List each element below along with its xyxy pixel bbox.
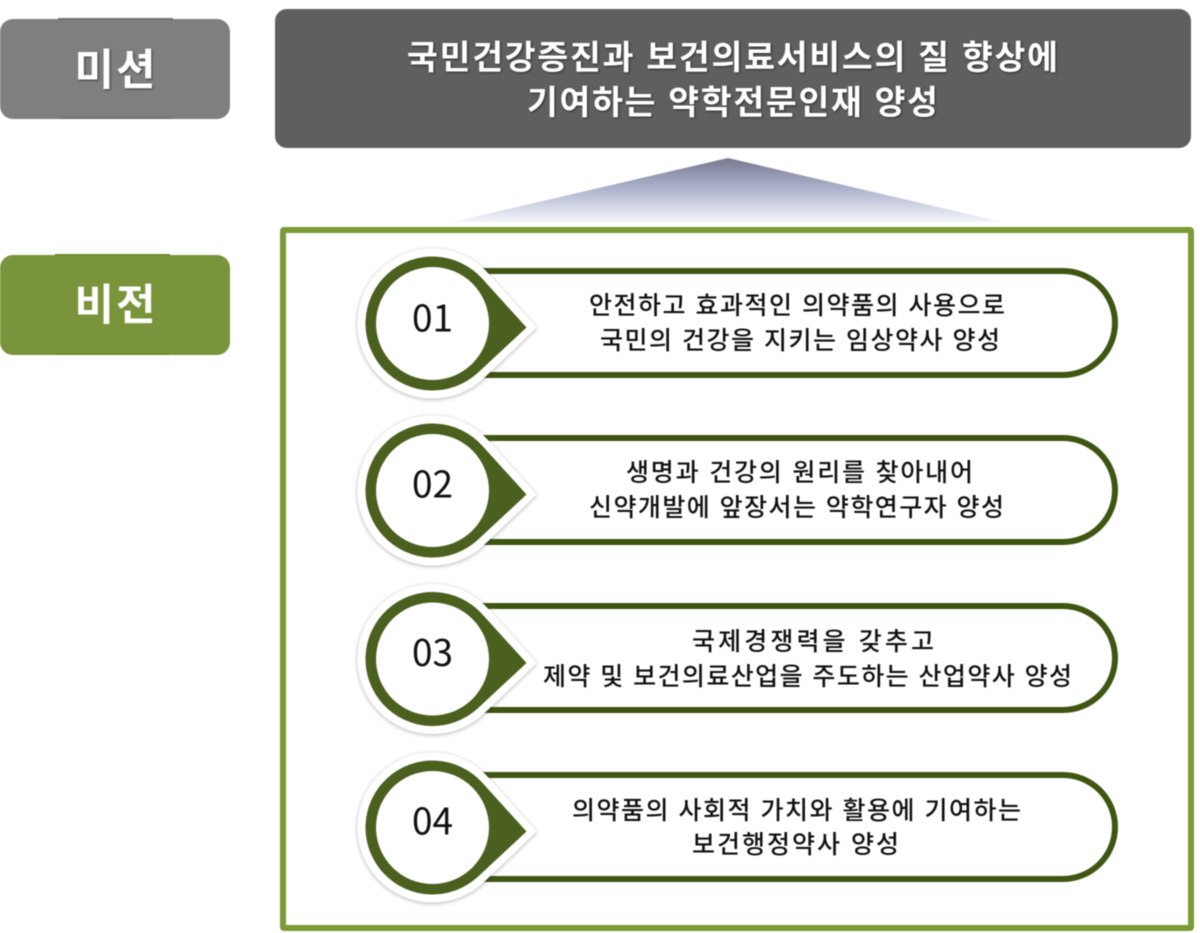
text 04 [572, 791, 1021, 861]
vision item 02 [357, 415, 1115, 565]
vision item 03 [357, 584, 1115, 734]
pill 03 [430, 606, 1115, 710]
badge 03: 03 [412, 623, 453, 677]
badge 02 [357, 415, 536, 565]
vision panel frame [283, 230, 1191, 928]
vision label: 비전 [74, 271, 156, 333]
mission label [0, 18, 230, 119]
mission statement box [275, 9, 1191, 148]
mission label: 미션 [74, 36, 156, 98]
pill 01 [430, 271, 1115, 375]
pill 02 [430, 438, 1115, 542]
text 03 [543, 622, 1072, 693]
text 01: 안전하고 효과적인 의약품의 사용으로 [589, 286, 1005, 322]
vision item 04 [357, 752, 1115, 902]
badge 01 [357, 248, 536, 398]
pill 04 [430, 775, 1115, 879]
text 01: 국민의 건강을 지키는 임상약사 양성 [600, 321, 1000, 357]
badge 02: 02 [412, 454, 453, 508]
text 02: 생명과 건강의 원리를 찾아내어 [626, 453, 973, 489]
text 02: 신약개발에 앞장서는 약학연구자 양성 [589, 488, 1004, 524]
vision item 01 [357, 248, 1115, 398]
vision label [0, 254, 230, 355]
text 02 [589, 453, 1004, 524]
text 04: 보건행정약사 양성 [692, 825, 899, 861]
badge 03 [357, 584, 536, 734]
badge 04: 04 [412, 792, 453, 846]
text 03: 제약 및 보건의료산업을 주도하는 산업약사 양성 [543, 657, 1072, 693]
badge 04 [357, 752, 536, 902]
text 03: 국제경쟁력을 갖추고 [692, 622, 934, 658]
text 04: 의약품의 사회적 가치와 활용에 기여하는 [572, 791, 1021, 827]
mission statement box: 국민건강증진과 보건의료서비스의 질 향상에 [407, 30, 1058, 79]
mission statement box: 기여하는 약학전문인재 양성 [527, 75, 938, 124]
text 01 [589, 286, 1005, 357]
badge 01: 01 [412, 288, 453, 342]
arrow: vision up to mission [452, 158, 1002, 222]
